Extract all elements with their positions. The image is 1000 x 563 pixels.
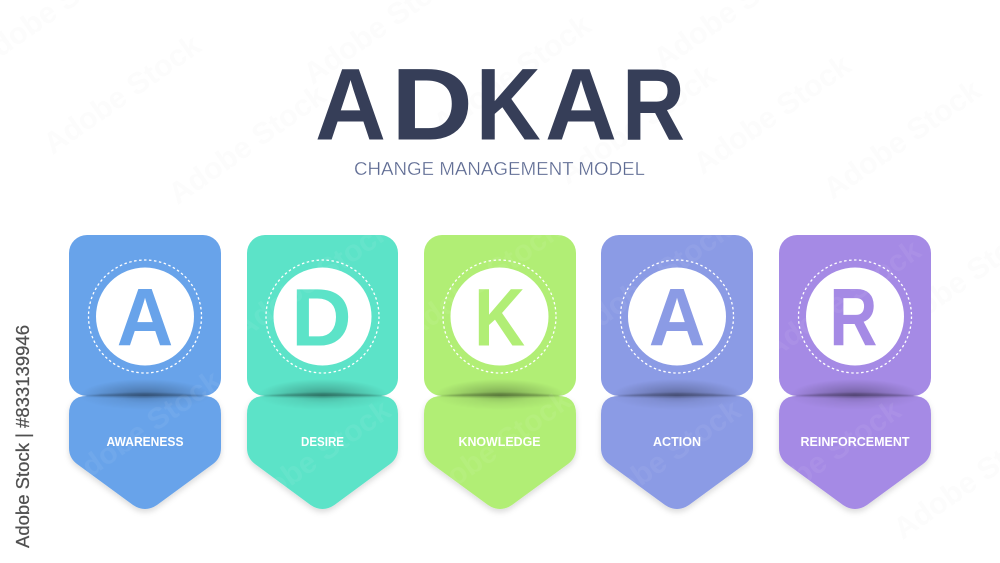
card arrow: [69, 396, 221, 509]
infographic canvas: Adobe Stock: [758, 234, 927, 366]
letter A: A: [649, 271, 705, 363]
card top: [69, 235, 221, 396]
badge circle: [628, 268, 726, 366]
letter A: A: [117, 271, 173, 363]
infographic canvas: Adobe Stock: [568, 214, 737, 346]
card top: [601, 235, 753, 396]
title: R: [622, 48, 685, 162]
badge circle: [96, 268, 194, 366]
panel: knowledge: [424, 235, 576, 509]
infographic canvas: Adobe Stock: [228, 214, 397, 346]
infographic canvas: Adobe Stock: [228, 394, 397, 526]
infographic canvas: Adobe Stock: [578, 394, 747, 526]
label: ACTION: [653, 435, 701, 449]
infographic canvas: Adobe Stock: [163, 79, 332, 211]
badge circle: [806, 268, 904, 366]
infographic canvas: Adobe Stock: [408, 384, 577, 516]
card arrow: [779, 396, 931, 509]
infographic canvas: Adobe Stock: [818, 74, 987, 206]
label: KNOWLEDGE: [458, 435, 540, 449]
panel: action: [601, 235, 753, 509]
subtitle: CHANGE MANAGEMENT MODEL: [354, 158, 645, 179]
title: A: [315, 48, 386, 162]
infographic canvas: Adobe Stock: [553, 59, 722, 191]
card top: [424, 235, 576, 396]
label: REINFORCEMENT: [800, 435, 910, 449]
infographic canvas: Adobe Stock: [38, 29, 207, 161]
letter R: R: [829, 271, 877, 363]
panel: awareness: [69, 235, 221, 509]
infographic canvas: Adobe Stock: [428, 9, 597, 141]
letter D: D: [291, 271, 352, 363]
panel: desire: [247, 235, 398, 509]
stock id text: Adobe Stock | #833139946: [13, 325, 33, 548]
title: D: [391, 48, 473, 162]
infographic canvas: [15, 69, 933, 548]
badge circle: [450, 268, 548, 366]
infographic canvas: Adobe Stock: [398, 214, 567, 346]
badge circle: [274, 268, 372, 366]
label: DESIRE: [301, 435, 344, 449]
infographic canvas: Adobe Stock: [58, 364, 227, 496]
card arrow: [424, 396, 576, 509]
panel: reinforcement: [779, 235, 931, 509]
card arrow: [601, 396, 753, 509]
label: AWARENESS: [106, 435, 184, 449]
title: A: [545, 48, 617, 162]
letter K: K: [474, 273, 525, 364]
title: [315, 48, 685, 162]
infographic canvas: Adobe Stock: [738, 394, 907, 526]
infographic canvas: Adobe Stock: [688, 49, 857, 181]
card top: [247, 235, 398, 396]
card arrow: [247, 396, 398, 509]
card top: [779, 235, 931, 396]
title: K: [476, 48, 541, 162]
